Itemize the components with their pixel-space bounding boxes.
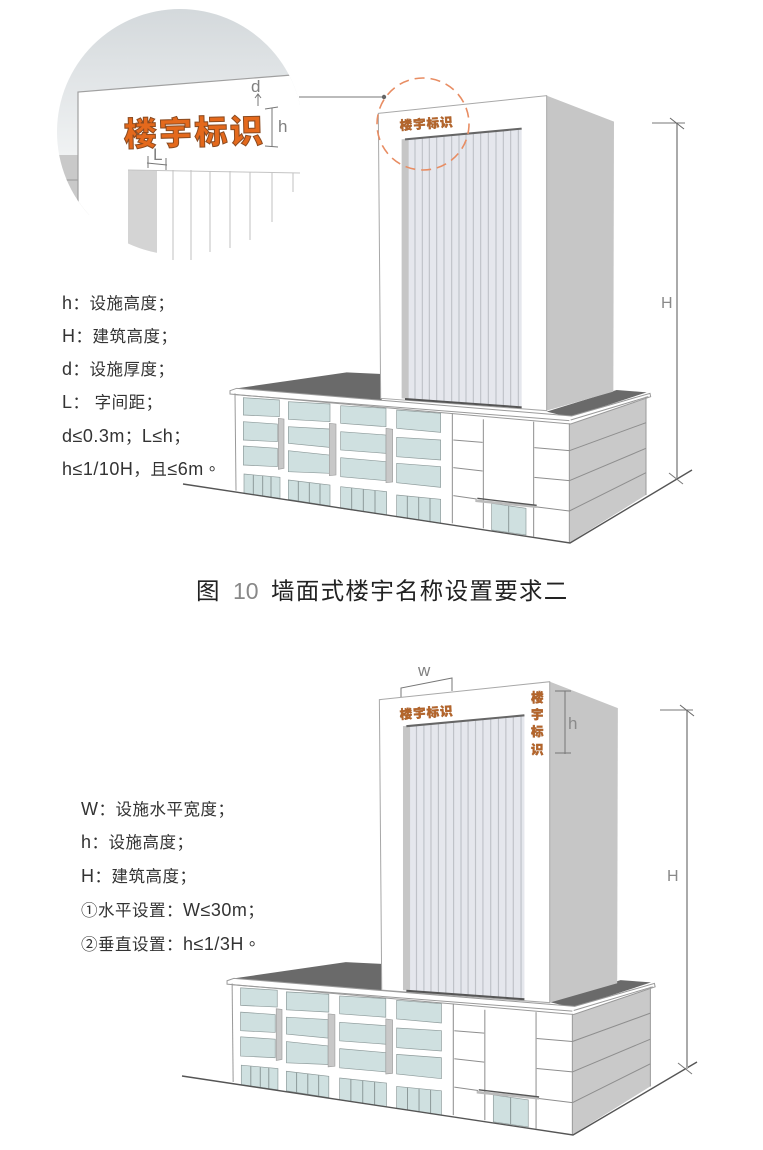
dimension d: d	[251, 77, 260, 96]
panel: detail magnifier inset	[57, 9, 300, 260]
text block: definitions, figure two: h：设施高度；	[81, 832, 194, 852]
dimension H, building one	[652, 118, 685, 484]
dashed highlight circle	[377, 78, 469, 170]
vertical sign on building two	[531, 691, 544, 757]
text block: definitions, figure two: W：设施水平宽度；	[81, 799, 234, 819]
dimension d	[251, 77, 261, 106]
text block: definitions, figure one: h≤1/10H，且≤6m。	[62, 459, 221, 479]
vertical sign on building two: 识	[531, 743, 544, 757]
text block: definitions, figure one: d≤0.3m；L≤h；	[62, 426, 190, 446]
dimension h: h	[278, 117, 287, 136]
figure caption: 墙面式楼宇名称设置要求二	[271, 578, 569, 604]
text block: definitions, figure two	[81, 799, 264, 954]
figure caption: 10	[233, 578, 259, 604]
dimension h, building two	[555, 691, 577, 754]
text block: definitions, figure two: H：建筑高度；	[81, 866, 196, 886]
dimension L	[147, 145, 167, 170]
dimension H, building two	[660, 705, 694, 1074]
text block: definitions, figure one	[62, 293, 221, 479]
text block: definitions, figure one: h：设施高度；	[62, 293, 175, 313]
building one: podium and tower	[183, 96, 692, 543]
dimension h, building two: h	[568, 714, 577, 733]
dimension H, building two: H	[667, 868, 679, 885]
dimension L: L	[153, 145, 162, 164]
ground line	[182, 1062, 697, 1135]
leader line from inset to dashed circle	[299, 95, 386, 99]
building two: podium and tower	[182, 682, 697, 1135]
text block: definitions, figure two: ①水平设置：W≤30m；	[81, 900, 264, 920]
ground line	[183, 470, 692, 543]
vertical sign on building two: 楼	[531, 691, 544, 705]
text block: definitions, figure one: d：设施厚度；	[62, 359, 175, 379]
facility sign lettering, enlarged: 楼宇标识	[123, 112, 266, 153]
dimension w	[401, 661, 452, 697]
vertical sign on building two: 标	[531, 724, 544, 739]
vertical sign on building two: 宇	[531, 707, 544, 722]
figure caption: 图	[196, 578, 220, 604]
dimension H, building one: H	[661, 295, 673, 312]
dimension w: w	[417, 661, 431, 680]
text block: definitions, figure two: ②垂直设置：h≤1/3H。	[81, 934, 261, 954]
dimension h	[265, 107, 287, 147]
text block: definitions, figure one: H：建筑高度；	[62, 326, 178, 346]
text block: definitions, figure one: L： 字间距；	[62, 392, 163, 412]
horizontal sign on building two: 楼宇标识	[399, 703, 454, 722]
sign on building one: 楼宇标识	[399, 114, 454, 133]
